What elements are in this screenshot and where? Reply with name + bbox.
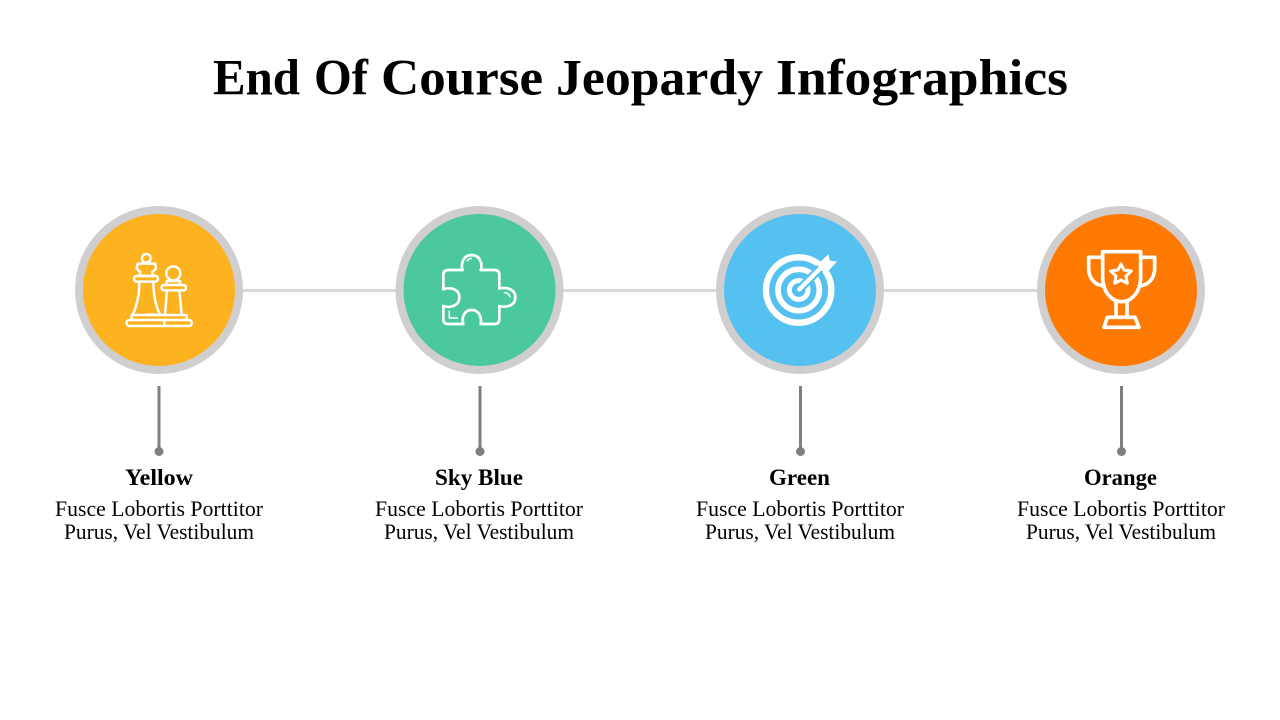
description: Fusce Lobortis Porttitor <box>55 496 264 521</box>
heading: Sky Blue <box>435 465 523 490</box>
description: Purus, Vel Vestibulum <box>1026 519 1216 544</box>
step 4: orange <box>1017 210 1226 544</box>
stem <box>1117 386 1126 456</box>
stem <box>476 386 484 456</box>
description <box>375 496 584 544</box>
description: Fusce Lobortis Porttitor <box>1017 496 1226 521</box>
heading: Orange <box>1084 465 1157 490</box>
icon: target with arrow <box>766 254 837 323</box>
stem <box>796 386 805 456</box>
step 3: green <box>696 210 905 544</box>
title: Of <box>314 50 369 106</box>
icon: chess pieces <box>127 254 192 326</box>
heading: Green <box>769 465 830 490</box>
circle: green <box>400 210 560 370</box>
description <box>55 496 264 544</box>
connector line <box>240 289 1040 292</box>
title: Course <box>381 50 543 106</box>
title: End <box>213 50 300 106</box>
description <box>1017 496 1226 544</box>
heading: Yellow <box>125 465 193 490</box>
icon: trophy with star <box>1089 252 1155 327</box>
description <box>696 496 905 544</box>
title: Infographics <box>776 50 1068 106</box>
description: Fusce Lobortis Porttitor <box>696 496 905 521</box>
circle: blue <box>720 210 880 370</box>
stem <box>154 386 164 456</box>
description: Purus, Vel Vestibulum <box>705 519 895 544</box>
step 2: sky blue <box>375 210 584 544</box>
icon: puzzle piece <box>443 255 515 324</box>
description: Fusce Lobortis Porttitor <box>375 496 584 521</box>
circle: yellow <box>79 210 239 370</box>
description: Purus, Vel Vestibulum <box>384 519 574 544</box>
description: Purus, Vel Vestibulum <box>64 519 254 544</box>
step 1: yellow <box>55 210 264 544</box>
circle: orange <box>1041 210 1201 370</box>
title: Jeopardy <box>556 50 763 106</box>
